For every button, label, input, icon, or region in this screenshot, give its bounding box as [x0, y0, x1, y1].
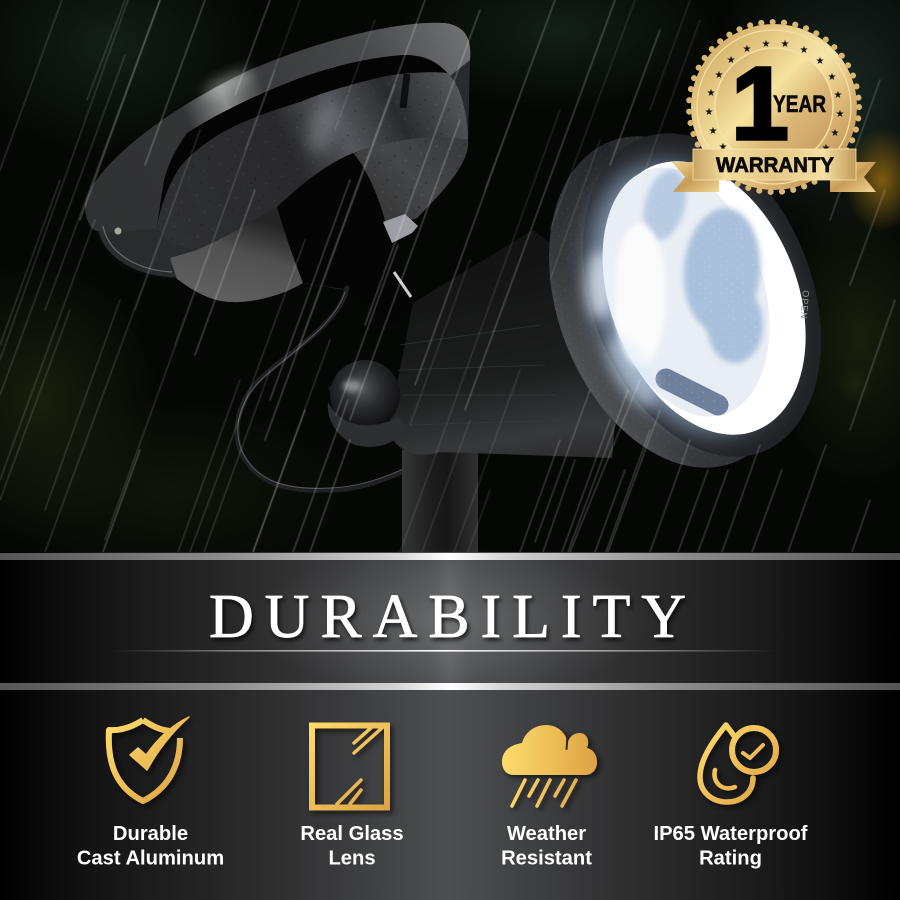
label line 2: Cast Aluminum [77, 848, 224, 870]
lens white rim [636, 161, 806, 435]
label: Weather [507, 823, 586, 845]
ball joint [328, 386, 332, 392]
label line 2: Rating [699, 848, 762, 870]
label: IP65 Waterproof [653, 823, 808, 845]
seal stars: ★ [727, 55, 736, 66]
rim lettering: OPEN [798, 290, 811, 320]
label: Durable [113, 823, 188, 845]
rain streaks [0, 0, 895, 552]
flange back band [549, 136, 746, 468]
icon: glass pane [312, 726, 387, 808]
label line 2: Resistant [501, 848, 592, 870]
feature: durable cast aluminum [77, 717, 224, 870]
glow on left edge [586, 251, 614, 319]
dish underside face [353, 137, 468, 228]
label line 2: Lens [328, 848, 376, 870]
panel rim surface [85, 23, 470, 232]
spotlight head [328, 133, 821, 468]
ribbon [672, 149, 876, 192]
heading rule [112, 650, 775, 652]
seal stars: ★ [828, 72, 837, 83]
seal stars: ★ [762, 39, 771, 50]
face droplets [355, 138, 466, 215]
glow lower left [600, 332, 662, 414]
night foliage background [0, 0, 900, 580]
barrel [388, 230, 625, 458]
screw [114, 228, 122, 234]
feature: real glass lens [300, 726, 404, 870]
seal stars: ★ [709, 126, 718, 137]
panel rim lower lip [97, 231, 177, 279]
rim highlight [201, 67, 255, 101]
icon: water drop with check [700, 725, 776, 802]
lens inner [602, 167, 770, 416]
seal [689, 22, 859, 192]
solar panel housing [85, 23, 470, 325]
wall dark slot [403, 74, 407, 108]
wall highlight [303, 100, 341, 156]
lens outer glow [569, 146, 808, 450]
features panel [0, 690, 900, 900]
photo scene: solar spotlight in rain [0, 0, 900, 580]
top metal bar [0, 553, 900, 560]
seal stars: ★ [781, 39, 790, 50]
dish droplets [157, 72, 468, 250]
seal stars: ★ [836, 109, 845, 120]
small block [383, 214, 418, 243]
seal stars: ★ [800, 45, 809, 56]
icon: shield with check [109, 717, 189, 801]
seal stars: ★ [707, 88, 716, 99]
barrel ribs [398, 325, 570, 425]
seal stars: ★ [719, 142, 728, 153]
feature: weather resistant [501, 725, 597, 870]
dish wall [158, 72, 468, 224]
black channel under rim [157, 55, 450, 228]
label: Real Glass [300, 823, 404, 845]
stake [402, 450, 478, 554]
ball socket [328, 402, 406, 447]
heading: DURABILITY [209, 583, 686, 651]
panel silhouette [85, 23, 470, 302]
seal stars: ★ [834, 90, 843, 101]
mount bracket [277, 153, 386, 289]
seal stars: ★ [831, 128, 840, 139]
seal stars [705, 39, 845, 154]
seal stars: ★ [822, 143, 831, 154]
seal stars: ★ [715, 70, 724, 81]
dish lower lobe [170, 227, 303, 302]
WARRANTY: WARRANTY [716, 154, 834, 177]
seal stars: ★ [816, 56, 825, 67]
metal pin [394, 272, 411, 297]
lens ring [583, 133, 821, 457]
seal stars: ★ [705, 107, 714, 118]
band speckle [550, 137, 744, 467]
numeral 1: 1 [731, 46, 789, 161]
cable [234, 286, 402, 493]
title band [0, 547, 900, 697]
icon: rain cloud [502, 725, 597, 806]
warranty badge [672, 22, 876, 192]
YEAR: YEAR [773, 91, 826, 118]
feature: IP65 waterproof [653, 725, 808, 870]
seal stars: ★ [743, 44, 752, 55]
lower metal bar [0, 683, 900, 690]
